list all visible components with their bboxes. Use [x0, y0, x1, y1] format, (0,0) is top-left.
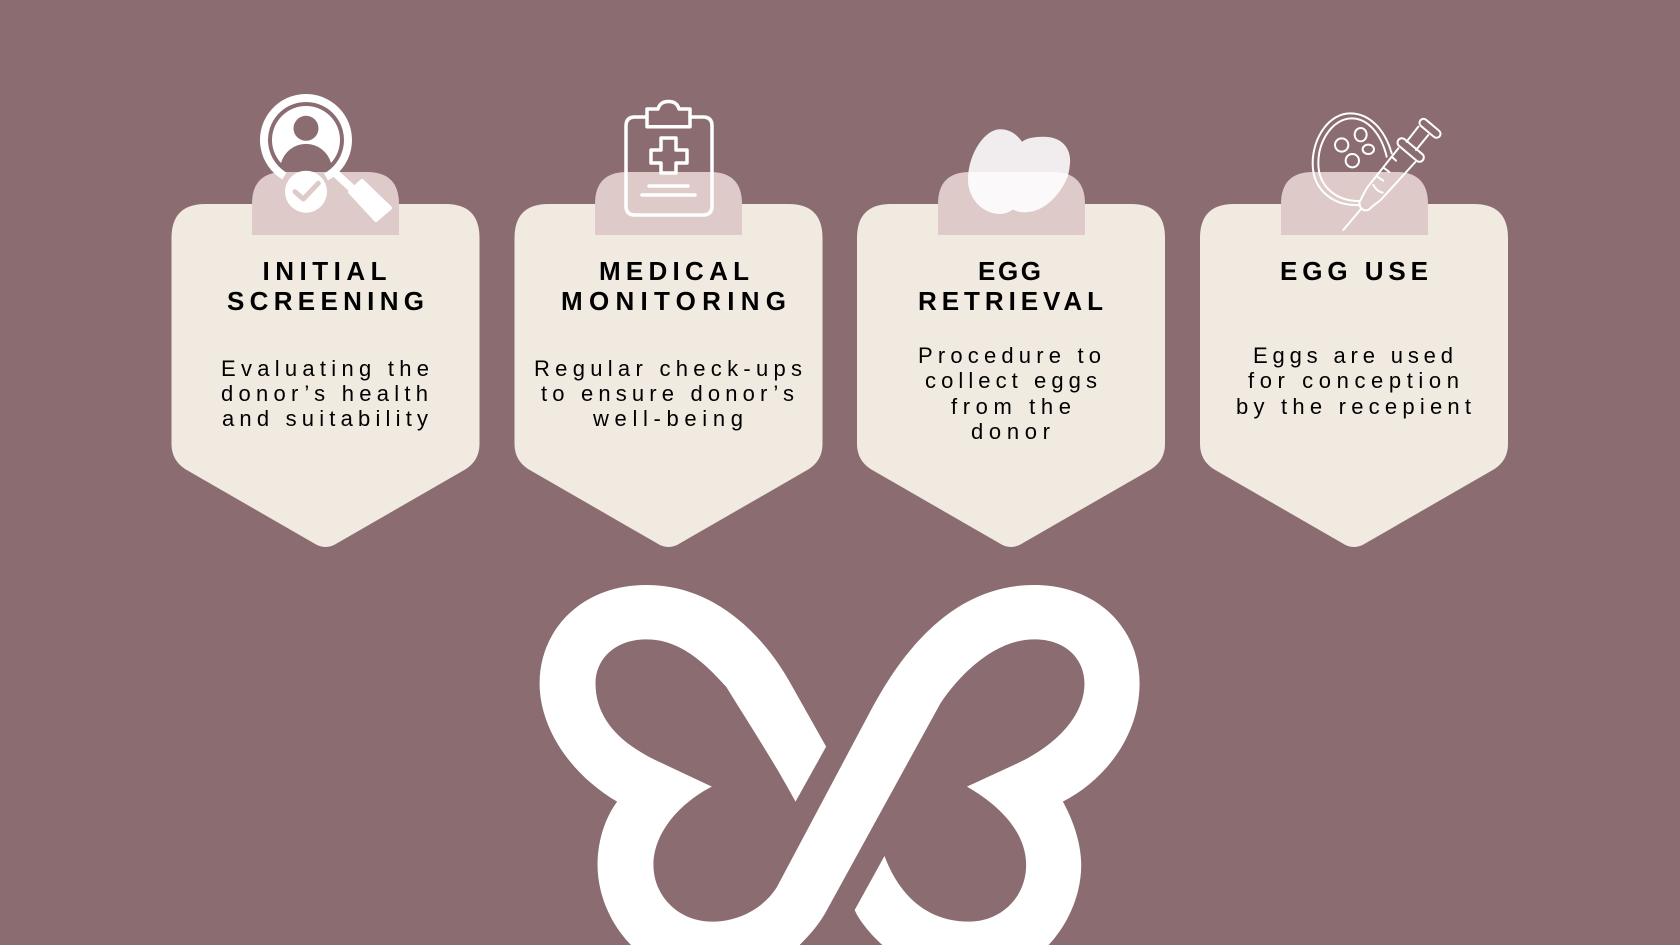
logo: white butterfly	[540, 585, 1140, 945]
tab	[938, 172, 1085, 235]
heading	[918, 256, 1103, 316]
icon: magnifying glass over person with check mark	[264, 98, 390, 220]
description: Eggs are used	[1253, 343, 1453, 368]
icon: clipboard with medical cross	[626, 102, 712, 215]
description: Regular check-ups	[534, 356, 802, 381]
tab	[1281, 172, 1428, 235]
heading: MEDICAL	[599, 256, 749, 286]
heading: INITIAL	[262, 256, 387, 286]
card shape	[514, 204, 822, 547]
heading	[227, 256, 424, 316]
card shape	[857, 204, 1165, 547]
heading: RETRIEVAL	[918, 286, 1103, 316]
heading: EGG USE	[1280, 256, 1428, 286]
description: from the	[951, 394, 1071, 419]
heading	[561, 256, 786, 316]
panel: egg use	[1200, 113, 1508, 547]
description: and suitability	[222, 406, 428, 431]
description	[534, 356, 802, 431]
tab	[595, 172, 742, 235]
description: collect eggs	[925, 368, 1097, 393]
heading: SCREENING	[227, 286, 424, 316]
icon: two eggs	[968, 129, 1070, 214]
description: Procedure to	[918, 343, 1101, 368]
description	[221, 356, 429, 431]
heading: MONITORING	[561, 286, 786, 316]
description: well-being	[592, 406, 743, 431]
card shape	[1200, 204, 1508, 547]
description: to ensure donor’s	[541, 381, 794, 406]
panel: medical monitoring	[514, 102, 822, 547]
heading: EGG	[978, 256, 1041, 286]
description: donor	[971, 419, 1050, 444]
description: donor’s health	[221, 381, 428, 406]
description: by the recepient	[1236, 394, 1471, 419]
description: Evaluating the	[221, 356, 429, 381]
icon: egg and syringe	[1313, 113, 1442, 230]
tab	[252, 172, 399, 235]
description	[1236, 343, 1471, 419]
panel: egg retrieval	[857, 129, 1165, 547]
panel: initial screening	[172, 98, 480, 547]
description	[918, 343, 1101, 444]
card shape	[172, 204, 480, 547]
description: for conception	[1248, 368, 1459, 393]
